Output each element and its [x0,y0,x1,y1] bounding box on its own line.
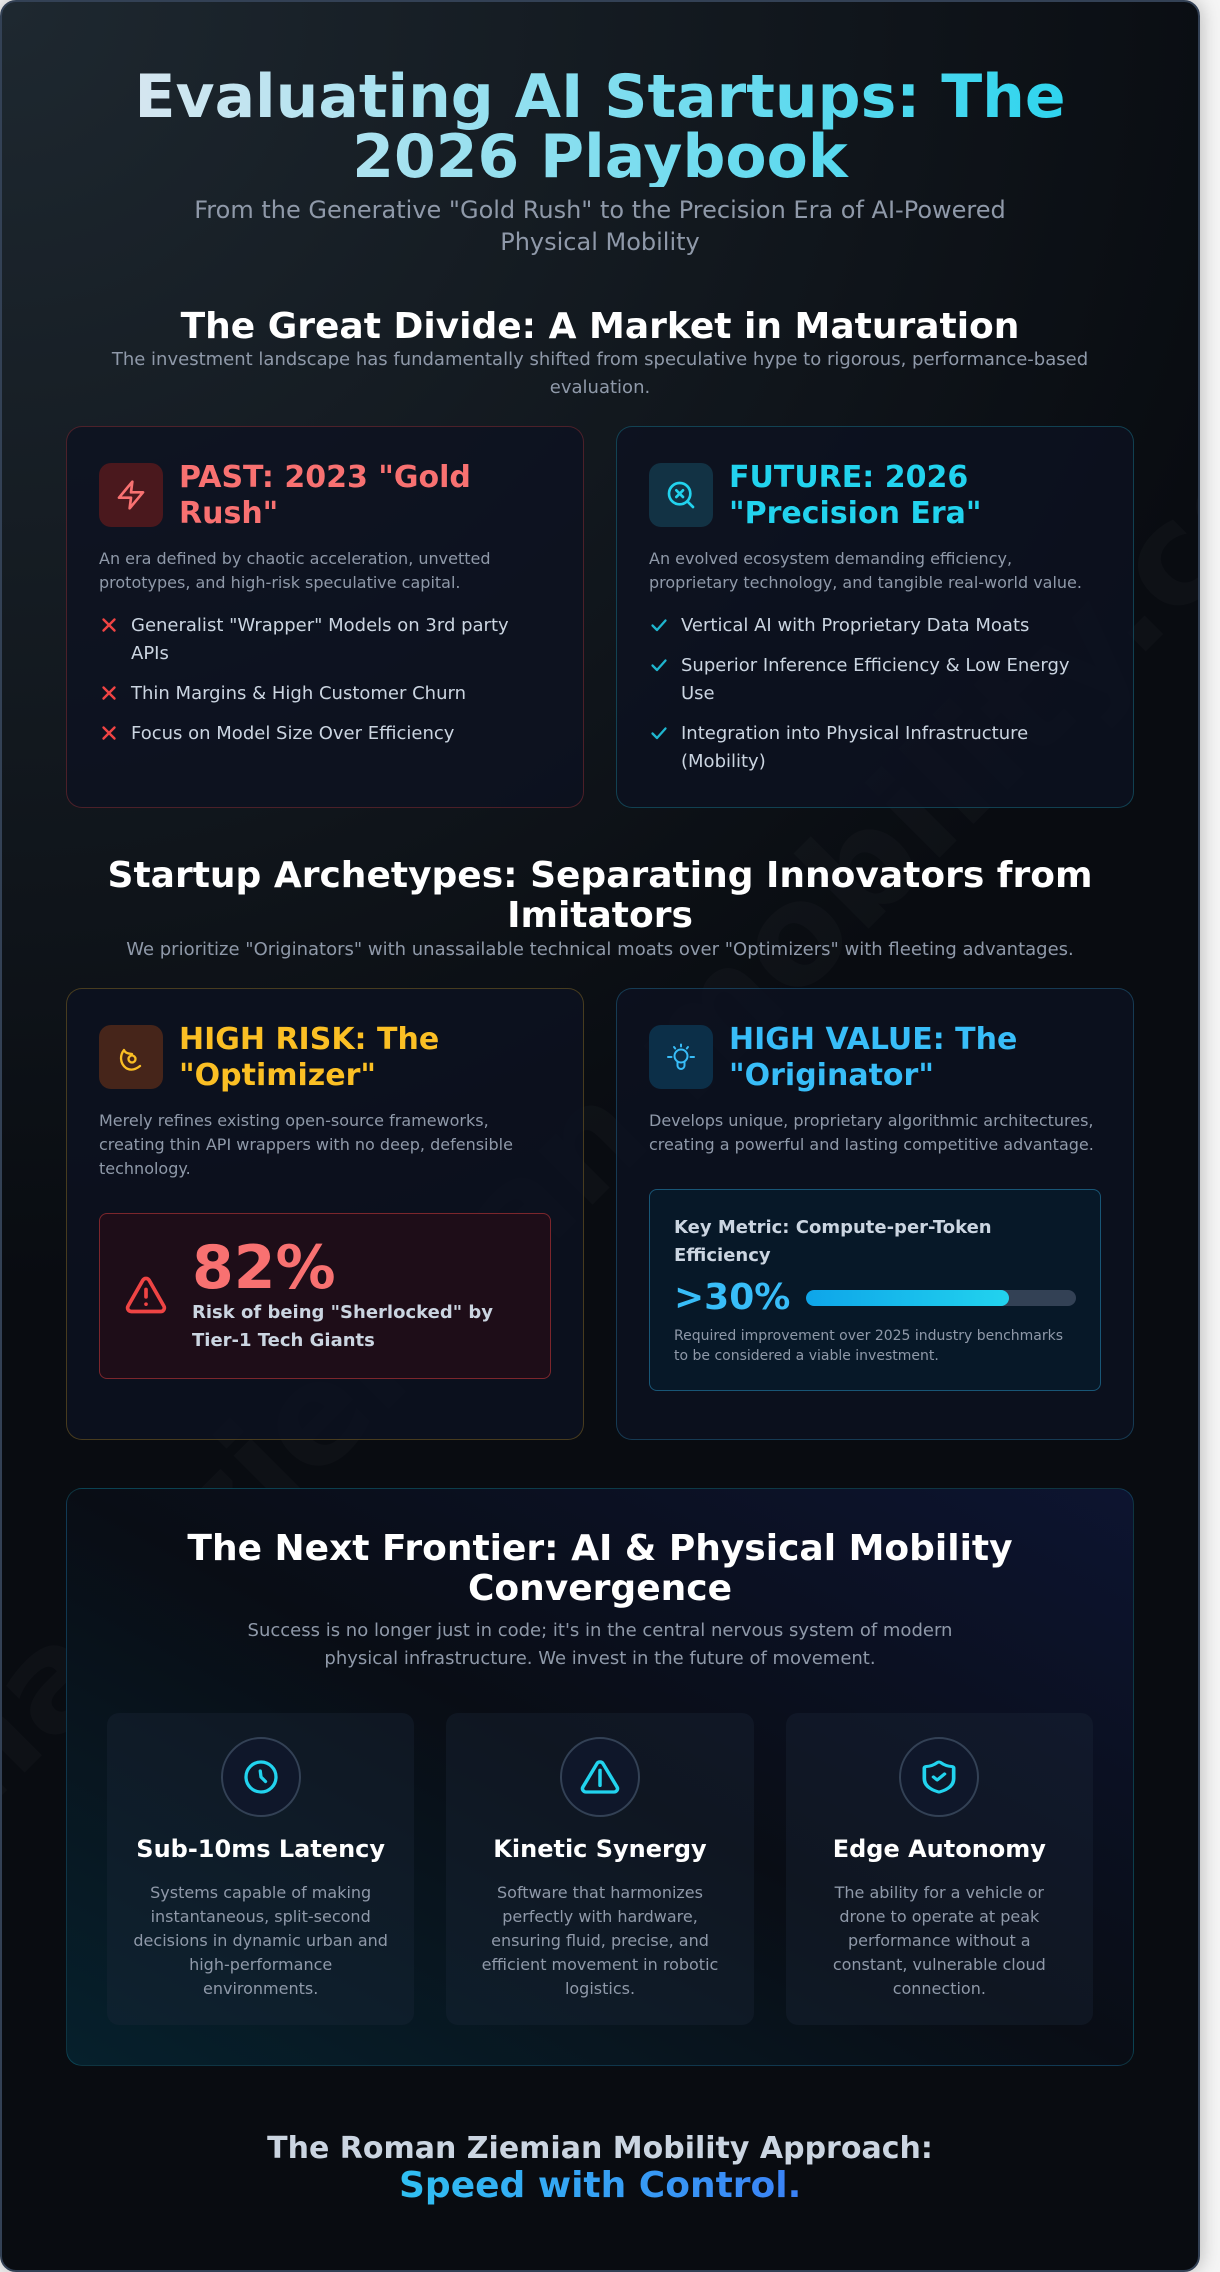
feature card: synergy [446,1713,754,2025]
stat label [192,1302,493,1351]
list: future traits: (Mobility) [681,751,766,772]
stat: 82%: 82% [192,1233,336,1303]
heading: startup archetypes [108,855,1092,936]
feature text: ensuring fluid, precise, and [491,1931,709,1950]
feature text: efficient movement in robotic [482,1955,718,1974]
feature text [833,1883,1046,1998]
intro: the great divide: The investment landscape has fundamentally shifted from speculative hype to rigorous, performance-based [112,349,1088,370]
list: future traits [651,615,1070,772]
feature text: logistics. [565,1979,635,1998]
heading: originator [729,1022,1017,1093]
list: past traits: Focus on Model Size Over Efficiency [131,723,454,744]
stat label: Tier-1 Tech Giants [192,1330,375,1351]
description: originator: Develops unique, proprietary algorithmic architectures, [649,1111,1094,1130]
icon: warning triangle [126,1276,166,1314]
feature text: environments. [203,1979,318,1998]
metric label [674,1217,992,1266]
feature card: latency [107,1713,414,2025]
heading: next frontier [187,1528,1013,1609]
intro: the great divide [112,349,1088,398]
callout: 82% risk [99,1213,551,1379]
description: optimizer: technology. [99,1159,191,1178]
icon: swirl [99,1025,163,1089]
metric note: Required improvement over 2025 industry benchmarks [674,1328,1063,1344]
intro: next frontier: Success is no longer just in code; it's in the central nervous system of modern [248,1620,952,1641]
description: optimizer: Merely refines existing open-source frameworks, [99,1111,489,1130]
title: Evaluating AI Startups: The [134,62,1066,132]
feature text: perfectly with hardware, [502,1907,698,1926]
metric label: Key Metric: Compute-per-Token [674,1217,992,1238]
feature text: connection. [893,1979,986,1998]
list: past traits: APIs [131,643,169,664]
list: past traits: Thin Margins & High Customer Churn [131,683,466,704]
intro: the great divide: evaluation. [550,377,650,398]
panel header: originator [649,1022,1017,1093]
heading: past: PAST: 2023 "Gold [179,460,471,495]
description: future: proprietary technology, and tangible real-world value. [649,573,1082,592]
description: future [649,549,1082,592]
heading: startup archetypes: Startup Archetypes: Separating Innovators from [108,855,1092,896]
list: future traits: Superior Inference Efficiency & Low Energy [681,655,1070,676]
feature text: Systems capable of making [150,1883,371,1902]
metric note: to be considered a viable investment. [674,1348,939,1364]
feature text: decisions in dynamic urban and [133,1931,388,1950]
callout: key metric [649,1189,1101,1391]
title [66,67,1134,187]
panel header: optimizer [99,1022,439,1093]
heading: future [729,460,982,531]
icon: magnifier [649,463,713,527]
heading: future: FUTURE: 2026 [729,460,968,495]
feature text: high-performance [189,1955,332,1974]
feature text: drone to operate at peak [839,1907,1039,1926]
list: past traits [102,615,509,744]
feature text [482,1883,718,1998]
feature text: constant, vulnerable cloud [833,1955,1046,1974]
icon: lightning bolt [99,463,163,527]
intro: startup archetypes: We prioritize "Originators" with unassailable technical moats over "Optimizers" with fleeting advantages. [126,939,1074,960]
metric label: Efficiency [674,1245,771,1266]
description: past: prototypes, and high-risk speculative capital. [99,573,460,592]
heading: startup archetypes: Imitators [507,895,693,936]
list: future traits: Integration into Physical Infrastructure [681,723,1028,744]
heading: next frontier: The Next Frontier: AI & Physical Mobility [187,1528,1013,1569]
feature card: autonomy [786,1713,1093,2025]
panel: high value originator [616,988,1134,1440]
panel: high risk optimizer [66,988,584,1440]
intro: next frontier: physical infrastructure. We invest in the future of movement. [324,1648,876,1669]
panel header: future [649,460,982,531]
list: future traits: Use [681,683,715,704]
panel: next frontier [66,1488,1134,2066]
heading: future: "Precision Era" [729,496,982,531]
footer tagline: Speed with Control. [399,2165,801,2206]
heading: the great divide: The Great Divide: A Market in Maturation [181,306,1019,347]
feature title: Edge Autonomy [833,1835,1046,1863]
list: future traits: Vertical AI with Proprietary Data Moats [681,615,1029,636]
heading: originator: HIGH VALUE: The [729,1022,1017,1057]
feature text: performance without a [848,1931,1031,1950]
heading: next frontier: Convergence [468,1568,732,1609]
heading: past: Rush" [179,496,278,531]
description: originator [649,1111,1094,1154]
feature text: Software that harmonizes [497,1883,703,1902]
feature title: Sub-10ms Latency [136,1835,385,1863]
feature text [133,1883,388,1998]
heading: optimizer [179,1022,439,1093]
description: optimizer [99,1111,513,1178]
icon: triangle [560,1737,640,1817]
metric note [674,1328,1063,1364]
subtitle [194,196,1006,256]
subtitle: Physical Mobility [500,228,700,256]
stat label: Risk of being "Sherlocked" by [192,1302,493,1323]
panel: future 2026 precision era [616,426,1134,808]
heading: originator: "Originator" [729,1058,934,1093]
subtitle: From the Generative "Gold Rush" to the Precision Era of AI-Powered [194,196,1006,224]
progress bar [806,1290,1076,1306]
heading: optimizer: "Optimizer" [179,1058,376,1093]
panel: past 2023 gold rush [66,426,584,808]
icon: light bulb [649,1025,713,1089]
feature title: Kinetic Synergy [493,1835,707,1863]
intro: next frontier [248,1620,952,1669]
icon: clock [221,1737,301,1817]
description: future: An evolved ecosystem demanding efficiency, [649,549,1012,568]
description: past [99,549,491,592]
description: optimizer: creating thin API wrappers with no deep, defensible [99,1135,513,1154]
description: originator: creating a powerful and lasting competitive advantage. [649,1135,1094,1154]
progress fill [806,1290,1008,1306]
icon: shield check [899,1737,979,1817]
heading: past [179,460,471,531]
heading: optimizer: HIGH RISK: The [179,1022,439,1057]
feature text: The ability for a vehicle or [835,1883,1044,1902]
footer line: The Roman Ziemian Mobility Approach: [267,2131,933,2166]
stat: >30%: >30% [674,1277,790,1318]
title: 2026 Playbook [352,122,848,192]
list: past traits: Generalist "Wrapper" Models on 3rd party [131,615,509,636]
description: past: An era defined by chaotic acceleration, unvetted [99,549,491,568]
panel header: past [99,460,471,531]
feature text: instantaneous, split-second [151,1907,371,1926]
